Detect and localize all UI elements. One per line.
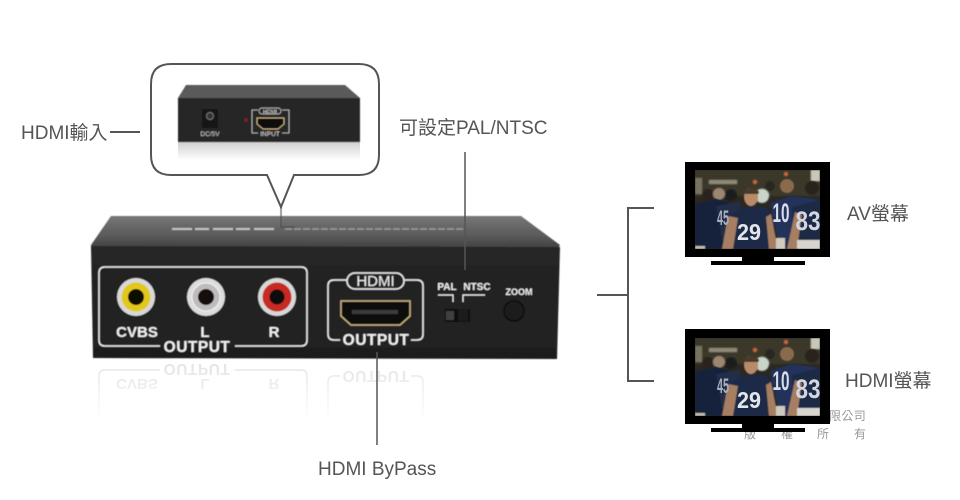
bracket connector (597, 208, 654, 381)
RCA yellow connector (117, 278, 155, 316)
TV picture: 29 (737, 387, 761, 413)
rear device body: INPUT (260, 131, 280, 138)
line: PAL/NTSC pointer (464, 152, 466, 270)
label: HDMI screen: HDMI螢幕 (845, 370, 932, 392)
device front panel (91, 246, 560, 359)
TV picture: 10 (772, 198, 790, 228)
label: PAL/NTSC setting: 可設定PAL/NTSC (399, 117, 548, 139)
RCA output group (99, 267, 307, 356)
HDMI output group: HDMI (356, 273, 395, 290)
HDMI output group: OUTPUT (343, 332, 409, 349)
watermark text: 有 (854, 427, 866, 441)
rear device body: HDMI (263, 110, 277, 116)
watermark text: 版 (744, 427, 756, 441)
TV picture: 83 (796, 374, 820, 404)
TV: HDMI screen (685, 329, 830, 432)
TV picture: 29 (737, 219, 761, 245)
TV picture: 45 (717, 207, 729, 230)
callout: rear view of device (151, 64, 379, 207)
ZOOM button (504, 287, 532, 321)
PAL/NTSC switch: NTSC (463, 282, 491, 293)
RCA output group: L (200, 324, 210, 341)
RCA red connector (258, 278, 296, 316)
rear reflection (178, 142, 360, 160)
HDMI output group (328, 273, 423, 349)
device front view (91, 207, 560, 359)
device reflection: OUTPUT (343, 367, 409, 384)
rear device body (178, 85, 360, 142)
TV picture (695, 170, 820, 249)
TV picture (695, 338, 820, 416)
line: HDMI bypass pointer (376, 352, 378, 445)
device top panel (91, 207, 560, 250)
ZOOM button: ZOOM (506, 287, 532, 297)
RCA output group: CVBS (116, 324, 158, 341)
watermark text: 科技有限公司 (792, 409, 866, 423)
label: HDMI input (21, 122, 140, 144)
label: AV screen: AV螢幕 (847, 203, 909, 225)
device reflection: OUTPUT (164, 360, 230, 377)
label: HDMI ByPass: HDMI ByPass (318, 459, 436, 480)
TV picture: 10 (772, 366, 790, 396)
RCA output group: OUTPUT (164, 339, 230, 356)
PAL/NTSC switch: PAL (437, 282, 457, 293)
device reflection: R (269, 375, 280, 392)
TV picture: 45 (717, 375, 729, 398)
watermark text: 所 (817, 427, 829, 441)
watermark text (744, 409, 866, 441)
watermark text: 權 (781, 427, 793, 441)
HDMI port (341, 301, 410, 325)
TV picture: 83 (796, 206, 820, 236)
label: HDMI input: HDMI輸入 (21, 122, 108, 144)
device reflection (91, 358, 557, 422)
PAL/NTSC switch (437, 282, 491, 322)
device reflection: L (200, 375, 210, 392)
rear device body: DC/5V (200, 131, 220, 138)
RCA white connector (187, 278, 225, 316)
TV: AV screen (685, 162, 830, 265)
RCA output group: R (269, 324, 280, 341)
device reflection: CVBS (116, 375, 158, 392)
